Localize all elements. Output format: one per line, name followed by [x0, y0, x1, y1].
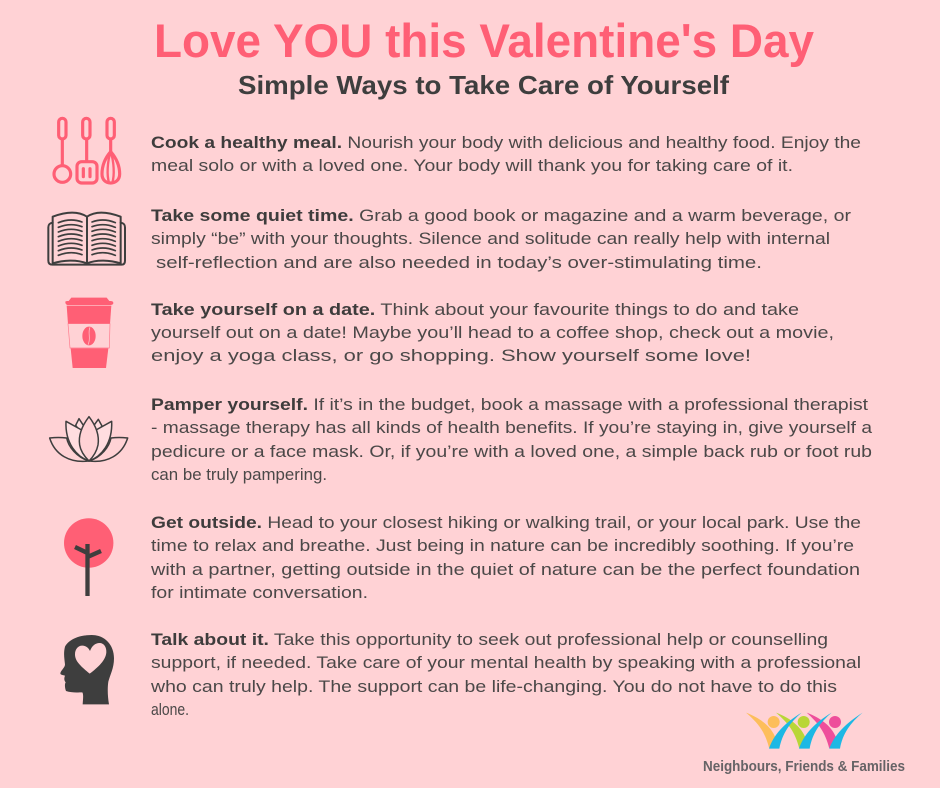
- icon: lotus flower: [50, 417, 128, 461]
- logo: Neighbours, Friends & Families: Neighbours, Friends & Families: [703, 759, 905, 775]
- text: talk about it: [150, 630, 861, 719]
- subtitle: Simple Ways to Take Care of Yourself: [238, 70, 729, 100]
- text: cook a healthy meal: meal solo or with a loved one. Your body will thank you for taking care of it.: [151, 156, 793, 175]
- text: cook a healthy meal: Cook a healthy meal. Nourish your body with delicious and healthy food. Enjoy the: [151, 133, 861, 152]
- text: take some quiet time: self-reflection and are also needed in today’s over-stimulating time.: [156, 253, 762, 272]
- text: take some quiet time: Take some quiet time. Grab a good book or magazine and a warm beverage, or: [151, 206, 851, 225]
- text: take some quiet time: [151, 206, 851, 272]
- text: pamper yourself: - massage therapy has all kinds of health benefits. If you’re staying in, give yourself a: [151, 418, 873, 437]
- text: get outside: [150, 513, 861, 602]
- text: get outside: for intimate conversation.: [151, 583, 368, 602]
- icon: open book: [48, 213, 125, 265]
- text: talk about it: alone.: [151, 700, 189, 719]
- text: pamper yourself: Pamper yourself. If it’s in the budget, book a massage with a professional therapist: [151, 395, 868, 414]
- text: take yourself on a date: enjoy a yoga class, or go shopping. Show yourself some love!: [151, 346, 751, 365]
- text: get outside: with a partner, getting outside in the quiet of nature can be the perfect foundation: [150, 560, 860, 579]
- icon: head with heart: [60, 635, 114, 704]
- title: Love YOU this Valentine's Day: [154, 14, 814, 67]
- text: cook a healthy meal: [151, 133, 861, 175]
- icon: coffee cup: [65, 298, 113, 368]
- text: talk about it: who can truly help. The support can be life-changing. You do not have to do this: [150, 677, 837, 696]
- text: take yourself on a date: yourself out on a date! Maybe you’ll head to a coffee shop, check out a movie,: [151, 323, 834, 342]
- text: pamper yourself: [151, 395, 873, 484]
- logo: Neighbours, Friends & Families: [703, 713, 905, 775]
- text: take some quiet time: simply “be” with your thoughts. Silence and solitude can really help with internal: [151, 229, 830, 248]
- text: take yourself on a date: [151, 300, 834, 365]
- icon: tree: [64, 518, 113, 596]
- text: talk about it: Talk about it. Take this opportunity to seek out professional help or counselling: [151, 630, 828, 649]
- text: pamper yourself: can be truly pampering.: [151, 465, 327, 484]
- icon: kitchen utensils: [54, 118, 120, 183]
- text: take yourself on a date: Take yourself on a date. Think about your favourite things to do and take: [151, 300, 799, 319]
- text: get outside: time to relax and breathe. Just being in nature can be incredibly soothing. If you’re: [151, 536, 854, 555]
- text: get outside: Get outside. Head to your closest hiking or walking trail, or your local park. Use the: [151, 513, 861, 532]
- text: talk about it: support, if needed. Take care of your mental health by speaking with a professional: [151, 653, 861, 672]
- text: pamper yourself: pedicure or a face mask. Or, if you’re with a loved one, a simple back rub or foot rub: [151, 442, 872, 461]
